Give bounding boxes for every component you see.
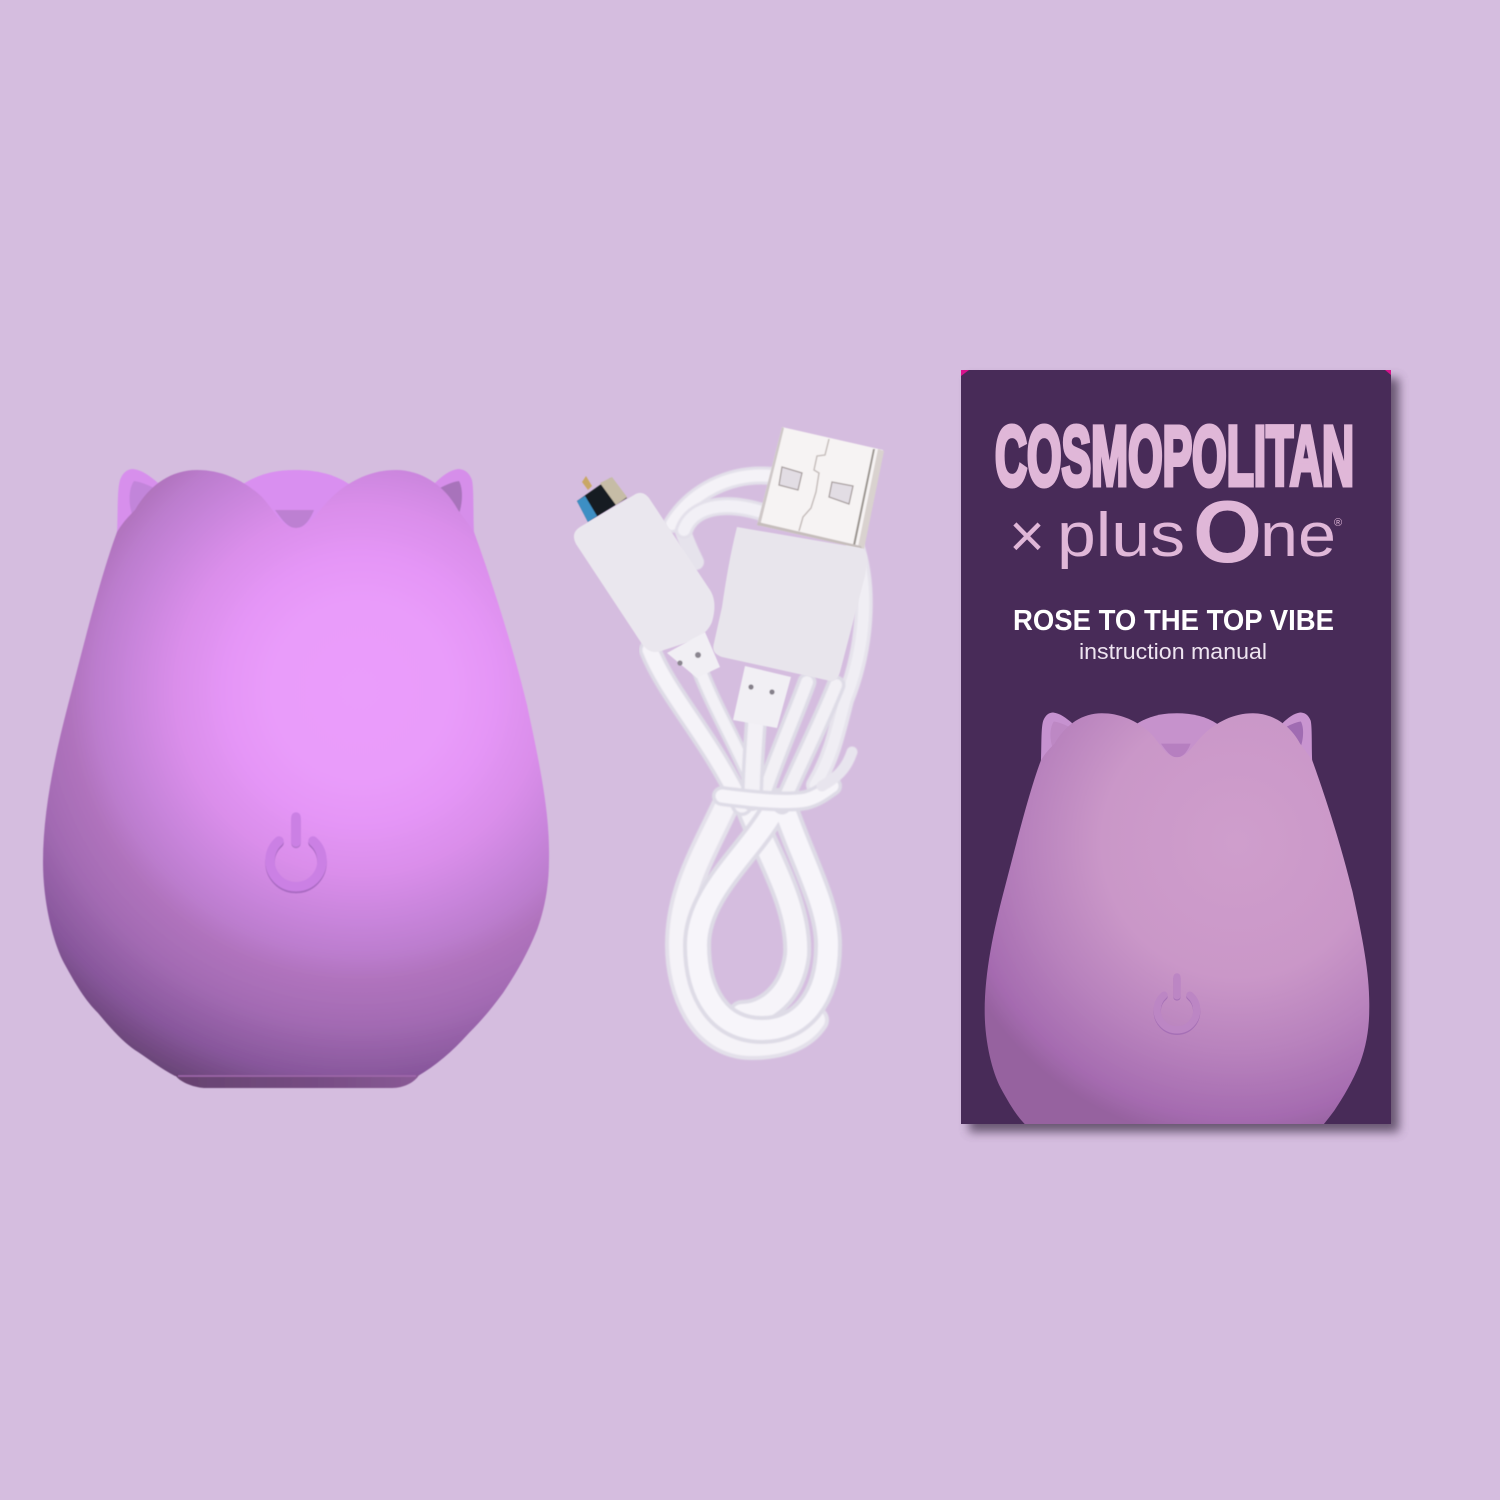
brand logo: x plusOne: O <box>1193 482 1262 581</box>
instruction manual card <box>961 370 1399 1174</box>
brand logo: x plusOne: plus <box>1057 501 1185 570</box>
USB metal plug <box>757 427 884 549</box>
icon: power button <box>270 817 322 889</box>
brand logo: x plusOne: × <box>1009 502 1045 571</box>
product name: ROSE TO THE TOP VIBE <box>1013 605 1334 637</box>
micro connector metal tip <box>577 476 627 522</box>
top loop strands <box>680 522 696 562</box>
subtitle: instruction manual <box>1079 639 1267 664</box>
USB strain relief <box>733 666 791 728</box>
large rose vibrator <box>43 469 549 1088</box>
base foot <box>175 1075 419 1088</box>
USB charging cable <box>574 427 884 1046</box>
USB plug housing <box>713 527 867 681</box>
micro connector housing <box>574 493 714 652</box>
card shadow <box>969 378 1399 1132</box>
micro strain relief <box>667 632 720 678</box>
product scene <box>42 370 1406 1139</box>
card rose illustration <box>984 712 1370 1124</box>
right ear petal <box>435 469 474 534</box>
left ear petal <box>117 469 158 534</box>
corner marks <box>961 370 1391 376</box>
lower loop strands <box>679 800 815 1046</box>
cable strands <box>650 475 864 1046</box>
upper strands to connectors <box>650 650 742 805</box>
back petal <box>243 470 349 535</box>
brand logo: x plusOne <box>1009 482 1342 581</box>
brand logo: x plusOne: ® <box>1334 517 1342 529</box>
brand logo: x plusOne: ne <box>1260 501 1336 570</box>
cable tie <box>722 786 832 801</box>
card background <box>961 370 1391 1124</box>
rose body <box>43 470 549 1076</box>
